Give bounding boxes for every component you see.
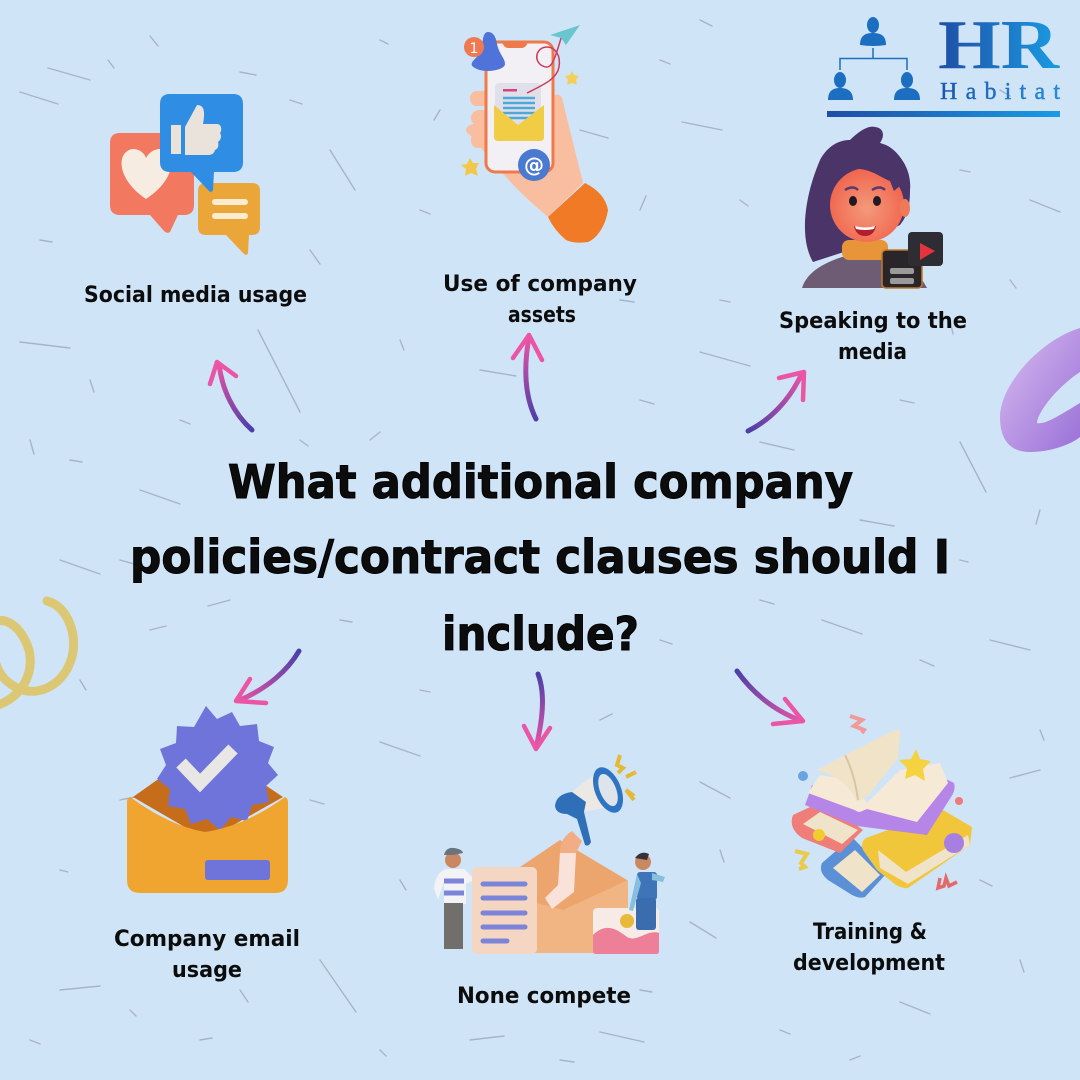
label: training and development [793, 920, 945, 976]
label: company email usage [114, 927, 300, 983]
icon: books [792, 716, 972, 898]
icon: phone in hand: 1 [470, 41, 478, 57]
decoration: purple ring [1000, 328, 1080, 452]
label: speaking to the media: Speaking to the [779, 309, 967, 334]
label: speaking to the media [779, 309, 967, 365]
title: policies/contract clauses should I [130, 530, 950, 584]
logo subtitle: Habitat [940, 79, 1060, 105]
icon: non compete megaphone scene [434, 755, 665, 954]
label: speaking to the media: media [838, 340, 907, 365]
title [130, 455, 950, 661]
arrow: to training [737, 671, 803, 724]
arrow: to email [236, 651, 299, 703]
arrow: to company assets [513, 335, 542, 419]
label: use of company assets [443, 272, 637, 328]
label: training and development: Training & [813, 920, 927, 945]
icon: verified envelope [127, 706, 288, 893]
arrow: to media [748, 372, 804, 431]
logo org chart icon [828, 17, 920, 100]
logo wordmark: HR [938, 7, 1061, 84]
label: company email usage: Company email [114, 927, 300, 952]
icon: woman speaking to media [802, 127, 943, 288]
arrow: to non compete [524, 674, 550, 749]
logo: HR Habitat [827, 7, 1061, 117]
label: use of company assets: Use of company [443, 272, 637, 297]
title: What additional company [228, 455, 853, 509]
icon: phone in hand [461, 25, 608, 243]
label: company email usage: usage [172, 958, 242, 983]
arrow: to social media [210, 362, 252, 430]
label: training and development: development [793, 951, 945, 976]
label: use of company assets: assets [508, 303, 576, 328]
label: none compete: None compete [457, 984, 631, 1009]
icon: social media reactions [110, 94, 260, 255]
label: social media usage: Social media usage [84, 283, 307, 308]
title: include? [442, 607, 639, 661]
decoration: gold spiral [0, 601, 74, 706]
icon: phone in hand: @ [524, 153, 544, 177]
